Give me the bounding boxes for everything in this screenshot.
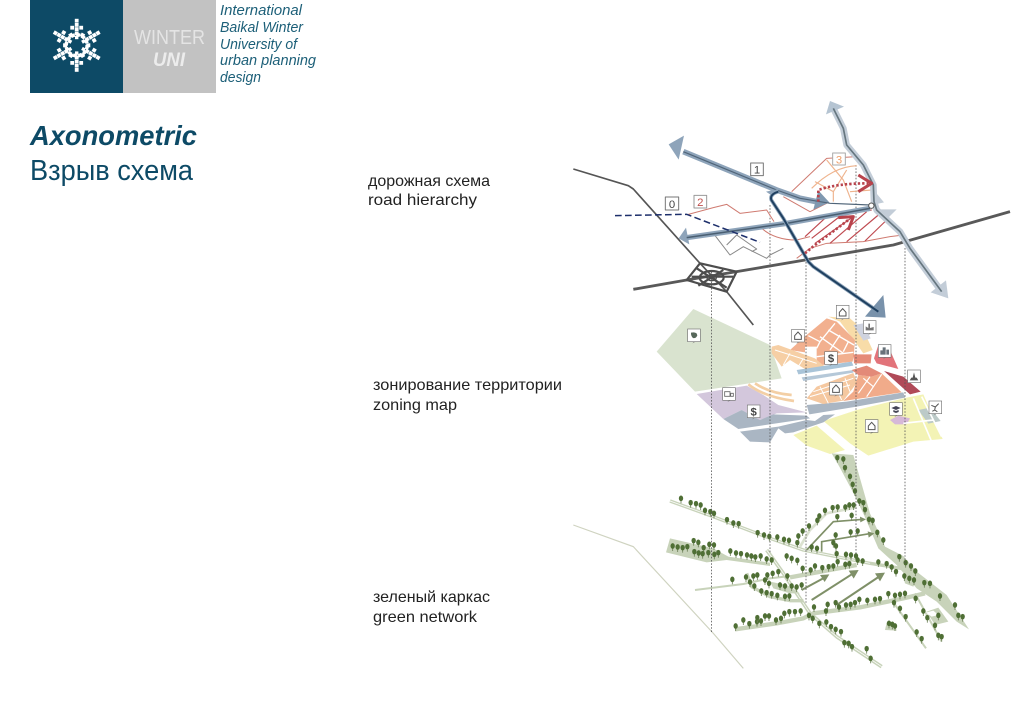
local streets: red and orange [688, 157, 903, 258]
label: zoning map: zoning map [373, 397, 457, 414]
icon: house marker [836, 305, 849, 320]
zone: salmon north block [790, 318, 855, 366]
route 1 arrow [669, 136, 870, 210]
title: Axonometric [29, 120, 197, 151]
logo: university name: design [220, 70, 261, 86]
icon: office marker [878, 345, 891, 359]
road label 0: 0 [669, 199, 675, 211]
logo block [30, 0, 316, 93]
white street cuts [903, 397, 942, 442]
dotted projection lines [712, 165, 905, 633]
road label 2 [694, 195, 707, 209]
logo: university name: University of [220, 37, 299, 53]
road label 1 [751, 163, 763, 177]
green network layer [573, 453, 969, 668]
label: road hierarchy [368, 173, 490, 209]
junction circle [869, 203, 874, 208]
road label 3 [833, 153, 845, 166]
logo: dark panel with snowflake [30, 0, 123, 93]
zone: red blocks [852, 345, 921, 394]
route 3 dark arrow [766, 189, 886, 318]
dashed navy road [615, 214, 760, 242]
road label 1: 1 [754, 165, 760, 177]
icon: graduation cap marker [890, 403, 902, 417]
motorway line [573, 169, 753, 325]
road label 2: 2 [697, 197, 703, 209]
zone: purple industrial [697, 386, 807, 420]
local streets: orange [812, 160, 872, 202]
highway [633, 212, 1010, 289]
icon: house marker [792, 329, 804, 344]
icon: dollar marker [825, 352, 837, 366]
route 2 arrow [679, 208, 870, 244]
local streets: grey [713, 233, 783, 258]
logo: university name [220, 3, 316, 86]
label: green network: зеленый каркас [373, 589, 490, 606]
zone: purple school patch [890, 416, 910, 424]
logo: university name: Baikal Winter [220, 20, 304, 36]
logo: grey panel: UNI [153, 50, 186, 71]
logo: grey panel [123, 0, 216, 93]
icon: house marker [865, 420, 878, 434]
icon: dollar marker: $ [828, 353, 835, 365]
contour line [573, 525, 743, 668]
icon: monument marker [908, 370, 920, 383]
icon: factory marker [863, 321, 876, 335]
title: Взрыв схема [30, 155, 194, 187]
label: green network: green network [373, 609, 477, 626]
zoning map layer [657, 305, 943, 456]
road label 0 [665, 197, 679, 211]
light grey river route with arrows [826, 101, 948, 298]
trees [673, 462, 963, 663]
icon: dollar marker: $ [751, 406, 758, 418]
local streets: dark red diagonals [805, 210, 887, 243]
zone: grey-lilac patch [853, 323, 871, 341]
label: road hierarchy: road hierarchy [368, 192, 477, 209]
logo: university name: urban planning [220, 53, 316, 69]
icon: dollar marker [747, 405, 760, 419]
logo: grey panel: WINTER [134, 27, 205, 49]
zone: grey-blue business [723, 392, 905, 442]
icon: house marker [830, 382, 842, 397]
zone: blue strips [797, 362, 853, 381]
label: zoning map [373, 377, 562, 414]
zone: north yellow band [828, 317, 873, 353]
zone: pale orange strips [772, 345, 825, 370]
interchange [687, 263, 737, 292]
logo: university name: International [220, 3, 303, 19]
icon: sport marker [929, 401, 942, 415]
green arrows [802, 517, 885, 605]
label: zoning map: зонирование территории [373, 377, 562, 394]
zone: green park [657, 309, 782, 392]
label: green network [373, 589, 490, 626]
zone: arcs near purple [748, 383, 794, 401]
zone: pale grey-blue patch [918, 408, 941, 424]
icon: leaf marker [688, 329, 700, 343]
label: road hierarchy: дорожная схема [368, 173, 490, 190]
red dotted arrows [805, 175, 872, 253]
road hierarchy layer [573, 101, 1010, 325]
title [29, 120, 197, 187]
zone: south salmon block [843, 373, 902, 401]
road label 3: 3 [836, 154, 842, 166]
zone: yellow residential [793, 394, 943, 456]
zone: south pale orange block [807, 373, 857, 404]
icon: truck marker [723, 388, 735, 402]
green ribbons [666, 453, 969, 667]
